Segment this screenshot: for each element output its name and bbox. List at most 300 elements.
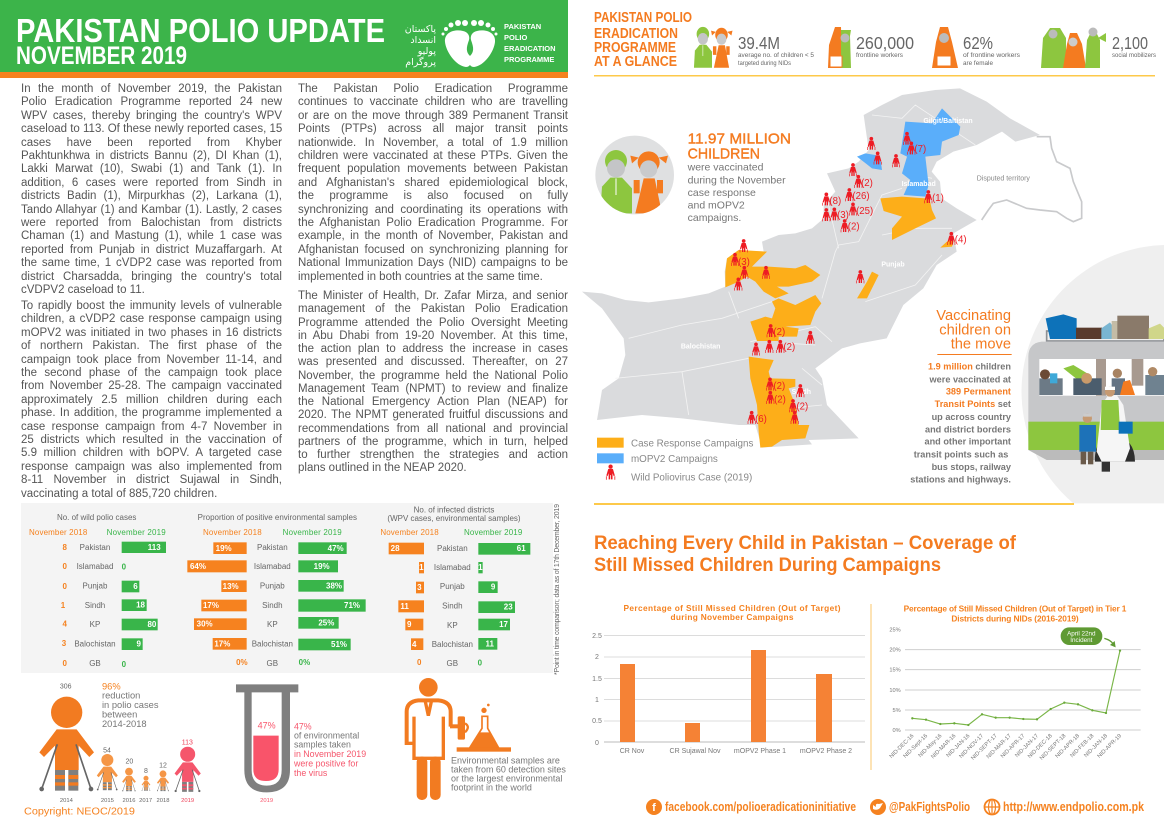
callout body: transit points such as — [914, 449, 1008, 459]
year labels — [60, 798, 194, 804]
table: infected districts: 11 — [400, 602, 409, 611]
table: positive environmental samples: KP — [267, 620, 278, 629]
stat: social mobilizers: social mobilizers — [1112, 53, 1156, 59]
callout: 11.97 million children: during the November — [688, 175, 786, 186]
table: wild polio cases: 0 — [122, 660, 127, 669]
text block: left column paragraph 2: the second phase of the campaign took place — [21, 367, 282, 379]
icon: scientist with flask — [407, 678, 511, 800]
case counts: (2) — [773, 381, 785, 392]
table: positive environmental samples: 30% — [197, 619, 213, 628]
table: infected districts: Balochistan — [432, 640, 473, 649]
text block: right column paragraph 2: to further strengthen the strategies and action — [298, 449, 568, 461]
case counts: (7) — [914, 144, 926, 155]
case counts: (2) — [796, 401, 808, 412]
callout body: and other important — [925, 437, 1011, 447]
line chart: tier 1 districts: NID-DEC-18 — [1027, 733, 1054, 760]
text block: left column paragraph 2: 8-11 November in district Sujawal in Sindh, — [21, 474, 282, 486]
text block: left column paragraph 2: To rapidly boost the immunity levels of vulnerable — [21, 300, 282, 312]
text block: right column paragraph 1: Points (PTPs) across all major transit points — [298, 123, 568, 135]
table: infected districts: 17 — [499, 620, 509, 629]
copyright: Copyright: NEOC/2019 — [24, 806, 135, 817]
icon: test tube: 2019 — [260, 798, 273, 804]
case counts: (2) — [773, 327, 785, 338]
table: positive environmental samples: 64% — [190, 562, 206, 571]
province boundaries — [615, 105, 975, 415]
text block: right column paragraph 2: was presented and discussed. Thereafter, on 27 — [298, 356, 568, 368]
table: infected districts: (WPV cases, environmental samples) — [387, 514, 521, 523]
stat: children targeted: targeted during NIDs — [738, 61, 791, 67]
case counts: 306 — [60, 683, 72, 690]
at a glance heading: ERADICATION — [594, 26, 678, 42]
table: wild polio cases: 6 — [133, 582, 138, 591]
table: positive environmental samples: Sindh — [262, 601, 283, 610]
table: positive environmental samples: Punjab — [260, 581, 285, 590]
logo wordmark: ERADICATION — [504, 44, 556, 53]
text block: right column paragraph 2: management of the Pakistan Polio Eradication — [298, 303, 568, 315]
table: positive environmental samples: Balochistan — [252, 639, 293, 648]
text block: left column paragraph 2: mOPV2 was initiated in two phases in 16 districts — [21, 327, 282, 339]
table: infected districts: 28 — [391, 544, 400, 553]
text block: right column paragraph 2: November, the programme held the National Polio — [298, 370, 568, 382]
text: positive samples: were positive for — [293, 759, 358, 769]
reduction text: 96% — [102, 682, 121, 692]
stat: social mobilizers: 2,100 — [1112, 33, 1148, 53]
bar chart: still missed children in November campaigns: CR Sujawal Nov — [670, 748, 721, 755]
province labels: Islamabad — [902, 181, 936, 188]
text block: left column paragraph 2: from November 25-28. The campaign vaccinated — [21, 380, 282, 392]
case response campaign districts — [725, 195, 954, 448]
text block: left column paragraph 2: 5.9 million children with bOPV. A targeted case — [21, 447, 282, 459]
provinces base — [582, 88, 1040, 448]
callout: April 22nd incident — [1061, 627, 1116, 647]
text block: right column paragraph 1: Afghanistan focused on synchronizing planning for — [298, 244, 568, 256]
table: positive environmental samples: 71% — [344, 601, 360, 610]
text block: right column paragraph 1: example, in the month of November, Pakistan and — [298, 230, 568, 242]
callout: 11.97 million children: and mOPV2 — [688, 200, 745, 211]
table: wild polio cases: November 2019 — [107, 528, 166, 537]
stat: female workers: 62% — [963, 33, 993, 53]
footnote: *Point in time comparison; data as of 17th December, 2019 — [554, 504, 561, 675]
case counts: (2) — [861, 178, 873, 189]
subtitle: NOVEMBER 2019 — [16, 42, 187, 70]
reduction text: reduction — [102, 691, 140, 701]
callout body: bus stops, railway — [932, 462, 1012, 472]
text block: right column paragraph 1: the programme is also focused on fully — [298, 190, 568, 202]
urdu programme name: پولیو — [417, 46, 436, 57]
line chart: tier 1 districts: 10% — [889, 688, 901, 694]
text block: left column paragraph 1: Tando Allahyar (1) and Kambar (1). Lastly, 2 cases — [21, 204, 282, 216]
stat: children targeted — [738, 33, 815, 67]
panel: reduction in polio cases — [24, 682, 201, 817]
table: infected districts — [380, 505, 530, 668]
text block: left column paragraph 1: WPV cases, thereby bringing the country's WPV — [21, 110, 282, 122]
callout body — [910, 361, 1012, 484]
callout body: stations and highways. — [910, 474, 1011, 484]
line chart: tier 1 districts: 15% — [889, 668, 901, 674]
section heading: coverage — [594, 532, 1016, 576]
icon: facebook: f — [652, 802, 656, 814]
bar chart: still missed children in November campaigns: mOPV2 Phase 2 — [800, 748, 852, 755]
text: positive samples: the virus — [294, 768, 328, 778]
icon: children circle — [595, 136, 674, 214]
case counts: (4) — [955, 234, 967, 245]
table: wild polio cases: 18 — [136, 600, 146, 609]
table: wild polio cases: Balochistan — [74, 639, 116, 648]
table: wild polio cases: 8 — [62, 543, 67, 552]
text block: right column paragraph 2: the National Emergency Action Plan (NEAP) for — [298, 396, 568, 408]
chart title: Districts during NIDs (2016-2019) — [951, 614, 1079, 624]
line chart: tier 1 districts: NID-DEC-16 — [889, 733, 915, 760]
detection sites text: taken from 60 detection sites — [451, 764, 566, 774]
bar chart: still missed children in November campaigns: 1.5 — [592, 676, 602, 683]
text block: right column paragraph 1: children were vaccinated at these PTPs. Given the — [298, 150, 568, 162]
icon: facebook — [646, 799, 662, 815]
line chart: tier 1 districts: NID-NOV-17 — [958, 733, 985, 760]
text block: right column paragraph 1: and Afghanistan's shared epidemiological block, — [298, 177, 568, 189]
table: positive environmental samples: 19% — [216, 544, 232, 553]
table: infected districts: 0 — [417, 658, 422, 667]
case counts: (8) — [829, 196, 841, 207]
at a glance heading: PROGRAMME — [594, 40, 676, 56]
facebook link: facebook.com/polioeradicationinitiative — [665, 800, 856, 814]
text block: right column paragraph 1: or are on the move through 389 Permanent Transit — [298, 110, 568, 122]
case counts: (6) — [755, 414, 767, 425]
line chart: tier 1 districts: NID-JAN-16 — [946, 733, 971, 759]
text block: right column paragraph 1: synchronizing and coordinating its operations with — [298, 204, 568, 216]
detection sites text — [451, 755, 566, 792]
table: wild polio cases: No. of wild polio cases — [57, 513, 136, 522]
callout heading: the move — [951, 337, 1011, 353]
callout: 11.97 million children — [687, 130, 791, 224]
text block: left column paragraph 1: district Charsadda, bringing the country's total — [21, 271, 282, 283]
table: wild polio cases: 0 — [62, 582, 67, 591]
table: wild polio cases: 0 — [122, 562, 127, 571]
table: positive environmental samples: 0% — [236, 658, 248, 667]
text block: left column paragraph 2: 25 districts which resulted in the vaccination of — [21, 434, 282, 446]
text block: right column paragraph 1: continues to vaccinate children who are travelling — [298, 96, 568, 108]
text block: right column paragraph 1: the Afghanistan Polio Eradication Programme. For — [298, 217, 568, 229]
table: wild polio cases: 9 — [137, 639, 142, 648]
urdu programme name — [405, 24, 436, 68]
text block: right column paragraph 2 — [298, 290, 568, 474]
table: wild polio cases: 3 — [62, 639, 67, 648]
callout: April 22nd incident: April 22nd — [1067, 630, 1096, 637]
text block: right column paragraph 2: recommendations from all national and provincial — [298, 422, 568, 434]
callout body: 389 Permanent — [946, 387, 1011, 397]
text block: right column paragraph 2: partners of the programme, which in turn, helped — [298, 436, 568, 448]
table: wild polio cases: 0 — [62, 562, 67, 571]
text block: left column paragraph 2: children, a cVDP2 case response campaign using — [21, 313, 282, 325]
bar chart: still missed children in November campaigns: mOPV2 Phase 1 — [734, 748, 786, 755]
text: positive samples: in November 2019 — [294, 749, 366, 759]
text block: right column paragraph 2: the action plan to address the increase in cases — [298, 343, 568, 355]
table: wild polio cases — [29, 513, 166, 669]
text block: left column paragraph 2: campaign took place from November 11-14, and — [21, 354, 282, 366]
text block: right column paragraph 2: The Minister of Health, Dr. Zafar Mirza, and senior — [298, 290, 568, 302]
text block: left column paragraph 1: addition, 6 cases were reported from Sindh in — [21, 177, 282, 189]
map legend: Case Response Campaigns — [631, 438, 753, 449]
twitter handle: @PakFightsPolio — [889, 800, 970, 814]
text block: right column paragraph 1: frequent population movements between Pakistan — [298, 163, 568, 175]
table: infected districts: 1 — [419, 563, 424, 572]
line chart: tier 1 districts: NID-MAR-17 — [986, 733, 1013, 760]
line chart: tier 1 districts: NID-SEPT-18 — [1039, 733, 1067, 762]
case counts — [60, 683, 193, 775]
table: infected districts: 1 — [478, 563, 483, 572]
table: infected districts: Punjab — [440, 582, 465, 591]
section heading: coverage: Reaching Every Child in Pakistan – Coverage of — [594, 532, 1016, 554]
table: infected districts: No. of infected districts — [414, 505, 494, 514]
text block: right column paragraph 2: Management Team (NPMT) to review and finalize — [298, 383, 568, 395]
chart title — [904, 603, 1127, 624]
case counts — [738, 144, 967, 425]
table: positive environmental samples: 13% — [223, 582, 239, 591]
mOPV2 campaign districts — [857, 108, 960, 197]
text block: left column paragraph 1: cVDPV2 caseload to 11. — [21, 284, 145, 296]
callout body: Transit Points set — [935, 399, 1011, 409]
text block: left column paragraph 2: phase. In addition, the programme implemented a — [21, 407, 282, 419]
header banner — [0, 0, 568, 78]
province labels: Balochistan — [681, 343, 720, 350]
at a glance heading — [594, 10, 692, 70]
panel: environmental samples test tube — [236, 684, 298, 804]
line chart: tier 1 districts: 25% — [889, 627, 901, 633]
text block: left column paragraph 2: response campaign was also implemented from — [21, 461, 282, 473]
map legend: mOPV2 Campaigns — [631, 454, 718, 465]
table: positive environmental samples: 19% — [314, 562, 330, 571]
table: positive environmental samples: November 2019 — [283, 528, 342, 537]
icon: website — [984, 799, 1000, 815]
bar chart: still missed children in November campaigns: 0 — [595, 740, 599, 747]
case counts: (26) — [852, 191, 870, 202]
callout: 11.97 million children: 11.97 MILLION — [688, 130, 791, 147]
province labels — [681, 118, 973, 396]
stat: children targeted: average no. of children < 5 — [738, 53, 815, 59]
table: wild polio cases: 80 — [147, 620, 157, 629]
year labels: 2017 — [139, 798, 152, 804]
table: positive environmental samples — [187, 513, 366, 668]
table: wild polio cases: 4 — [62, 619, 67, 628]
wild poliovirus case markers — [731, 132, 955, 424]
table: infected districts: November 2018 — [380, 528, 439, 537]
line chart: tier 1 districts: NID-APR-18 — [1055, 733, 1081, 760]
map legend — [597, 438, 753, 483]
footer social links — [646, 799, 1144, 815]
urdu programme name: پروگرام — [405, 56, 436, 68]
table: wild polio cases: 113 — [148, 543, 161, 552]
stat: female workers: of frontline workers — [963, 53, 1020, 59]
table: infected districts: 23 — [504, 602, 513, 611]
case counts: 20 — [125, 759, 133, 766]
text block: left column paragraph 1: reported from Punjab in district Muzaffargarh. At — [21, 244, 282, 256]
line chart: tier 1 districts: NID-JAN-17 — [1014, 733, 1040, 759]
province labels: Punjab — [881, 261, 905, 268]
callout body: up across country — [932, 412, 1012, 422]
callout body: and district borders — [925, 424, 1011, 434]
reduction text — [102, 682, 159, 729]
text block: left column paragraph 1: Lakki Marwat (10), Swabi (1) and Tank (1). In — [21, 163, 282, 175]
case counts: (1) — [932, 193, 944, 204]
title: PAKISTAN POLIO UPDATE — [16, 12, 385, 49]
table: positive environmental samples: 0% — [299, 658, 310, 667]
reduction text: between — [102, 710, 137, 720]
reduction text: 2014-2018 — [102, 719, 147, 729]
text block: right column paragraph 2: 2020. The NPMT generated fruitful discussions and — [298, 409, 568, 421]
line chart: tier 1 districts: NID-May-16 — [918, 733, 943, 759]
text block: left column paragraph 1: Polio Eradication Programme reported 24 new — [21, 96, 282, 108]
table: wild polio cases: 1 — [61, 601, 66, 610]
text: positive samples: 47% — [294, 721, 312, 731]
bar chart: still missed children in November campaigns: 2 — [595, 654, 599, 661]
map of Pakistan — [582, 88, 1082, 483]
panel: comparison tables — [21, 503, 553, 673]
line chart: tier 1 districts: NID-MAR-16 — [930, 733, 957, 760]
callout heading: children on — [939, 322, 1011, 338]
at a glance heading: PAKISTAN POLIO — [594, 10, 692, 26]
chart title: during November Campaigns — [670, 612, 794, 622]
text block: left column paragraph 1 — [21, 83, 282, 296]
text: positive samples: of environmental — [294, 731, 359, 741]
disputed territory outline: Disputed territory — [977, 175, 1030, 182]
text block: left column paragraph 2: case response campaign from 4-7 November in — [21, 421, 282, 433]
line chart: tier 1 districts: 0% — [892, 728, 901, 734]
case counts: (3) — [738, 257, 750, 268]
callout: 11.97 million children: CHILDREN — [688, 145, 760, 162]
case counts: (25) — [856, 206, 873, 217]
table: infected districts: 3 — [417, 583, 422, 592]
line chart: tier 1 districts: 5% — [892, 708, 901, 714]
chart title — [624, 603, 841, 622]
case counts: (2) — [774, 394, 786, 405]
detection sites text: footprint in the world — [451, 782, 532, 792]
case counts: 54 — [103, 748, 111, 755]
bar chart: still missed children in November campaigns — [592, 603, 865, 755]
chart title: Percentage of Still Missed Children (Out of Target) — [624, 603, 841, 613]
text block: left column paragraph 1: districts Badin (1), Mirpurkhas (2), Larkana (1), — [21, 190, 282, 202]
text block: left column paragraph 1: caseload to 113. Of these newly reported cases, 15 — [21, 123, 282, 135]
table: positive environmental samples: Islamabad — [254, 562, 291, 571]
table: infected districts: 0 — [478, 658, 483, 667]
text block: left column paragraph 1: cases have been reported from Khyber — [21, 137, 282, 149]
line chart: tier 1 districts: NID-APR-17 — [1000, 733, 1026, 760]
at a glance heading: AT A GLANCE — [594, 54, 677, 70]
province labels: Sindh — [792, 389, 811, 396]
urdu programme name: انسداد — [410, 35, 436, 46]
pictogram: cases by year — [39, 697, 201, 792]
table: infected districts: 9 — [491, 582, 496, 591]
case counts: (2) — [783, 342, 795, 353]
detection sites text: or the largest environmental — [451, 773, 562, 783]
table: wild polio cases: Punjab — [83, 581, 108, 590]
callout: 11.97 million children: were vaccinated — [687, 163, 764, 174]
line chart: tier 1 districts: NID-APR-19 — [1097, 733, 1123, 760]
year labels: 2015 — [101, 798, 114, 804]
logo wordmark: PAKISTAN — [504, 22, 541, 31]
line chart: tier 1 districts — [889, 603, 1141, 762]
line chart: tier 1 districts: NID-JAN-18 — [1083, 733, 1109, 759]
panel: detection sites — [407, 678, 566, 800]
bus illustration — [1022, 245, 1164, 503]
province labels: Gilgit/Baltistan — [923, 118, 973, 125]
bar chart: still missed children in November campaigns: 2.5 — [592, 633, 602, 640]
text block: left column paragraph 2: approximately 2.5 million children during each — [21, 394, 282, 406]
disputed territory outline — [977, 137, 1082, 222]
table: positive environmental samples: 38% — [326, 581, 342, 590]
callout heading: Vaccinating — [936, 308, 1011, 324]
icon: test tube — [236, 684, 298, 804]
logo wordmark: POLIO — [504, 33, 528, 42]
text block: right column paragraph 1 — [298, 83, 568, 283]
line chart: tier 1 districts: 20% — [889, 648, 901, 654]
callout body: 1.9 million children — [928, 361, 1011, 371]
year labels: 2016 — [123, 798, 135, 804]
callout heading — [936, 308, 1012, 355]
table: positive environmental samples: 25% — [318, 618, 334, 627]
bar chart: still missed children in November campaigns: 1 — [595, 697, 599, 704]
stat: female workers: are female — [963, 61, 994, 67]
table: positive environmental samples: Pakistan — [257, 543, 288, 552]
reduction text: in polio cases — [102, 700, 159, 710]
case counts: (3) — [837, 210, 849, 221]
text block: left column paragraph 1: were reported from Balochistan from districts — [21, 217, 282, 229]
table: infected districts: KP — [447, 621, 458, 630]
text block: right column paragraph 1: nationwide. In November, a total of 1.9 million — [298, 137, 568, 149]
callout: 11.97 million children: campaigns. — [688, 213, 741, 224]
callout body: were vaccinated at — [929, 374, 1011, 384]
case counts: 8 — [144, 768, 148, 775]
table: wild polio cases: November 2018 — [29, 528, 88, 537]
text: positive samples — [293, 721, 366, 778]
icon: test tube: 47% — [258, 721, 276, 731]
icon: female worker — [932, 27, 958, 68]
icon: logo footprints with drop — [442, 20, 498, 67]
map legend: Wild Poliovirus Case (2019) — [631, 472, 752, 483]
table: positive environmental samples: Proportion of positive environmental samples — [198, 513, 357, 522]
table: infected districts: 9 — [407, 620, 412, 629]
text block: left column paragraph 1: the same time, 1 cVDP2 case was reported from — [21, 257, 282, 269]
stat: children targeted: 39.4M — [738, 33, 780, 53]
year labels: 2014 — [60, 798, 74, 804]
urdu programme name: پاکستان — [405, 24, 436, 35]
logo wordmark: PROGRAMME — [504, 55, 554, 64]
callout: 11.97 million children: case response — [688, 188, 756, 199]
table: wild polio cases: Pakistan — [80, 543, 110, 552]
table: wild polio cases: Islamabad — [77, 562, 113, 571]
table: infected districts: Sindh — [442, 601, 463, 610]
text block: right column paragraph 1: implemented in both countries at the same time. — [298, 271, 543, 283]
table: infected districts: 4 — [412, 640, 417, 649]
bar chart: still missed children in November campaigns: CR Nov — [620, 748, 645, 755]
year labels: 2019 — [181, 798, 194, 804]
bar chart: still missed children in November campaigns: 0.5 — [592, 718, 602, 725]
text block: right column paragraph 1: The Pakistan Polio Eradication Programme — [298, 83, 568, 95]
table: wild polio cases: Sindh — [85, 601, 105, 610]
case counts: 12 — [159, 762, 167, 769]
table: positive environmental samples: GB — [267, 659, 278, 668]
text block: left column paragraph 2 — [21, 300, 282, 500]
logo wordmark — [504, 22, 556, 64]
table: positive environmental samples: 47% — [328, 544, 344, 553]
table: infected districts: Islamabad — [434, 563, 471, 572]
panel: vaccinating children on the move — [910, 245, 1164, 503]
table: infected districts: Pakistan — [437, 544, 468, 553]
table: infected districts: 61 — [517, 544, 526, 553]
table: wild polio cases: 0 — [62, 659, 67, 668]
detection sites text: Environmental samples are — [451, 755, 560, 765]
table: positive environmental samples: 17% — [214, 639, 230, 648]
icon: twitter — [870, 799, 886, 815]
table: positive environmental samples: November 2018 — [203, 528, 262, 537]
